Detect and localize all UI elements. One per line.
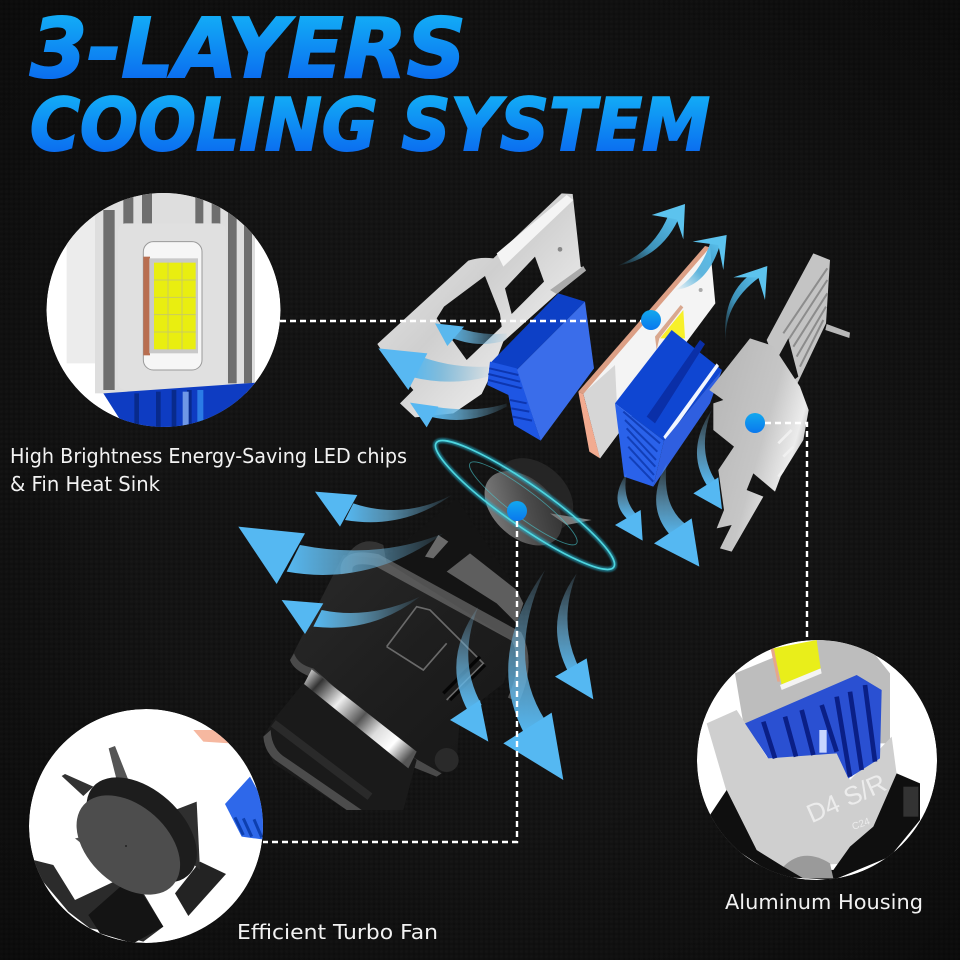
airflow arrows: upward out of assembly	[617, 204, 767, 347]
airflow arrows: downward below heat sinks	[615, 410, 722, 567]
lamp base with fan and airflow	[238, 426, 626, 810]
left aluminum housing half	[377, 193, 586, 417]
marker dots	[507, 310, 765, 521]
fan with glowing ring	[424, 426, 626, 584]
dashed leader lines	[263, 321, 807, 842]
title	[30, 2, 710, 167]
copper LED circuit board	[578, 246, 715, 458]
title: COOLING SYSTEM	[30, 83, 710, 167]
caption: LED chips and heat sink: & Fin Heat Sink	[10, 472, 160, 496]
caption: turbo fan: Efficient Turbo Fan	[237, 920, 438, 944]
inset circle: LED chips and fin heat sink	[46, 190, 280, 430]
airflow arrows: through left housing	[378, 323, 507, 427]
right aluminum housing half	[709, 253, 850, 552]
airflow arrows: left of lamp	[238, 492, 452, 634]
right blue fin heat sink	[615, 330, 722, 487]
caption: LED chips and heat sink: High Brightness Energy-Saving LED chips	[10, 444, 407, 468]
exploded assembly: housing, heat sinks, LED board	[377, 193, 850, 567]
left blue fin heat sink	[487, 293, 594, 441]
inset circle: aluminum housing: C24	[851, 816, 872, 833]
caption: LED chips and heat sink	[10, 444, 407, 496]
chrome ring	[304, 669, 417, 768]
caption: aluminum housing: Aluminum Housing	[725, 890, 923, 914]
inset circle: aluminum housing	[697, 640, 937, 880]
black lamp body and collar	[290, 498, 523, 777]
title: 3-LAYERS	[30, 2, 466, 97]
airflow arrows: right of lamp	[450, 570, 593, 780]
lens tube	[263, 675, 417, 810]
inset circle: aluminum housing: D4 S/R	[802, 767, 891, 829]
inset circle: turbo fan	[29, 709, 267, 943]
